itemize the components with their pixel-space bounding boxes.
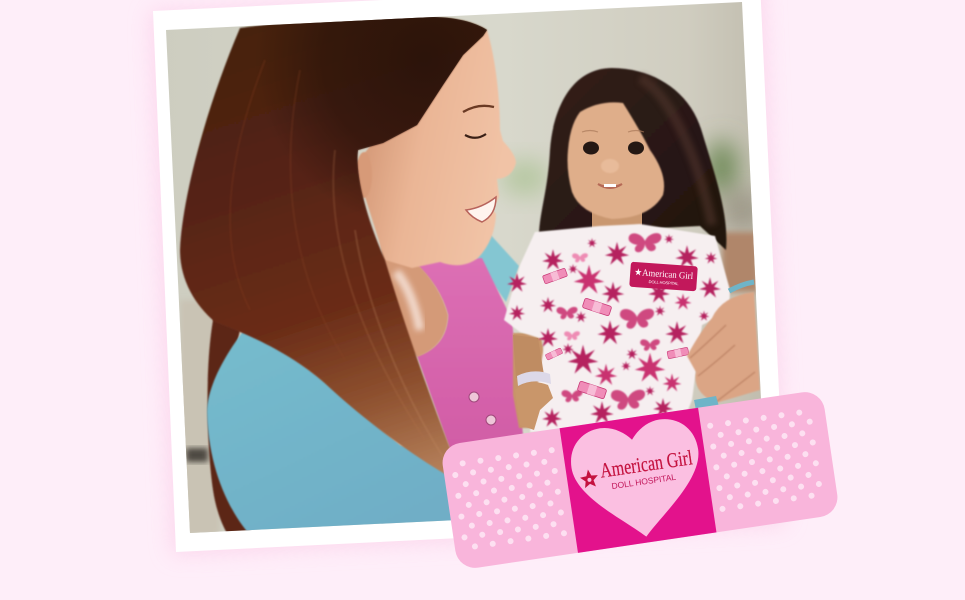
hair top shadow (274, 17, 487, 208)
pink top (416, 257, 524, 448)
frame glow (150, 0, 786, 555)
badge plate (629, 262, 698, 291)
eyebrow (463, 106, 494, 112)
gown print: butterflies (556, 233, 661, 410)
doll wristband (517, 371, 551, 386)
girl's hand on doll (687, 292, 760, 403)
smile (466, 197, 496, 222)
face (355, 30, 516, 268)
doll arm over gown edge (513, 335, 544, 378)
blurred orange furniture (722, 232, 758, 292)
bandage (440, 389, 840, 571)
sweater sliver near hand (694, 396, 720, 410)
doll right eyebrow (628, 130, 644, 132)
dark spot in backdrop (186, 448, 208, 462)
badge sub text: DOLL HOSPITAL (648, 279, 680, 286)
logo star (579, 468, 599, 489)
doll left eye (583, 142, 599, 154)
logo subtext: DOLL HOSPITAL (611, 472, 677, 491)
doll mouth (598, 184, 622, 188)
strand highlight 2 (290, 70, 302, 258)
doll scrub gown (504, 224, 730, 432)
large flowers (507, 242, 721, 427)
photo (160, 0, 780, 540)
girl (180, 16, 524, 535)
fingers creases (690, 325, 755, 402)
doll hair sheen (640, 78, 712, 225)
strand highlight 4 (354, 230, 420, 416)
blue sweater collar (474, 232, 519, 302)
long hair (180, 16, 487, 478)
badge brand text: ★American Girl (634, 267, 694, 282)
strand highlight 1 (230, 60, 266, 264)
doll nose (601, 159, 619, 173)
back hair strip (208, 315, 254, 535)
doll neck (592, 212, 642, 228)
button 1 (469, 392, 479, 402)
closed eye (465, 134, 486, 138)
logo star center (587, 478, 592, 482)
bandage pads (440, 389, 840, 571)
skin highlight (396, 272, 420, 330)
center band (560, 408, 716, 553)
strand highlight 3 (332, 150, 387, 374)
gown print: bandages (542, 268, 689, 399)
blurred dark right edge (722, 190, 762, 230)
small flowers (562, 234, 717, 395)
left pad dots (454, 450, 565, 548)
doll right eye (628, 142, 644, 154)
hair strands (230, 60, 420, 416)
chest skin (380, 240, 448, 357)
doll face (568, 102, 664, 219)
blurred green plant right (706, 140, 738, 196)
blurred green plant left (501, 160, 549, 196)
doll left arm (513, 333, 553, 428)
doll (504, 68, 760, 432)
lower left backdrop (180, 300, 220, 535)
blue sweater body (206, 332, 451, 530)
ear (358, 152, 366, 198)
doll left eyebrow (582, 130, 598, 132)
right pad dots (710, 411, 821, 509)
heart (566, 415, 710, 546)
infographic canvas (146, 0, 838, 568)
doll hair (539, 68, 726, 250)
doll teeth (604, 184, 616, 187)
white photo frame (153, 0, 785, 552)
logo text: American Girl (598, 445, 694, 483)
sweater cuff (729, 282, 754, 291)
button 2 (486, 415, 496, 425)
doll hand (515, 382, 553, 430)
gown badge (629, 262, 698, 291)
photo backdrop (160, 0, 780, 540)
gown print: flowers (507, 234, 721, 427)
